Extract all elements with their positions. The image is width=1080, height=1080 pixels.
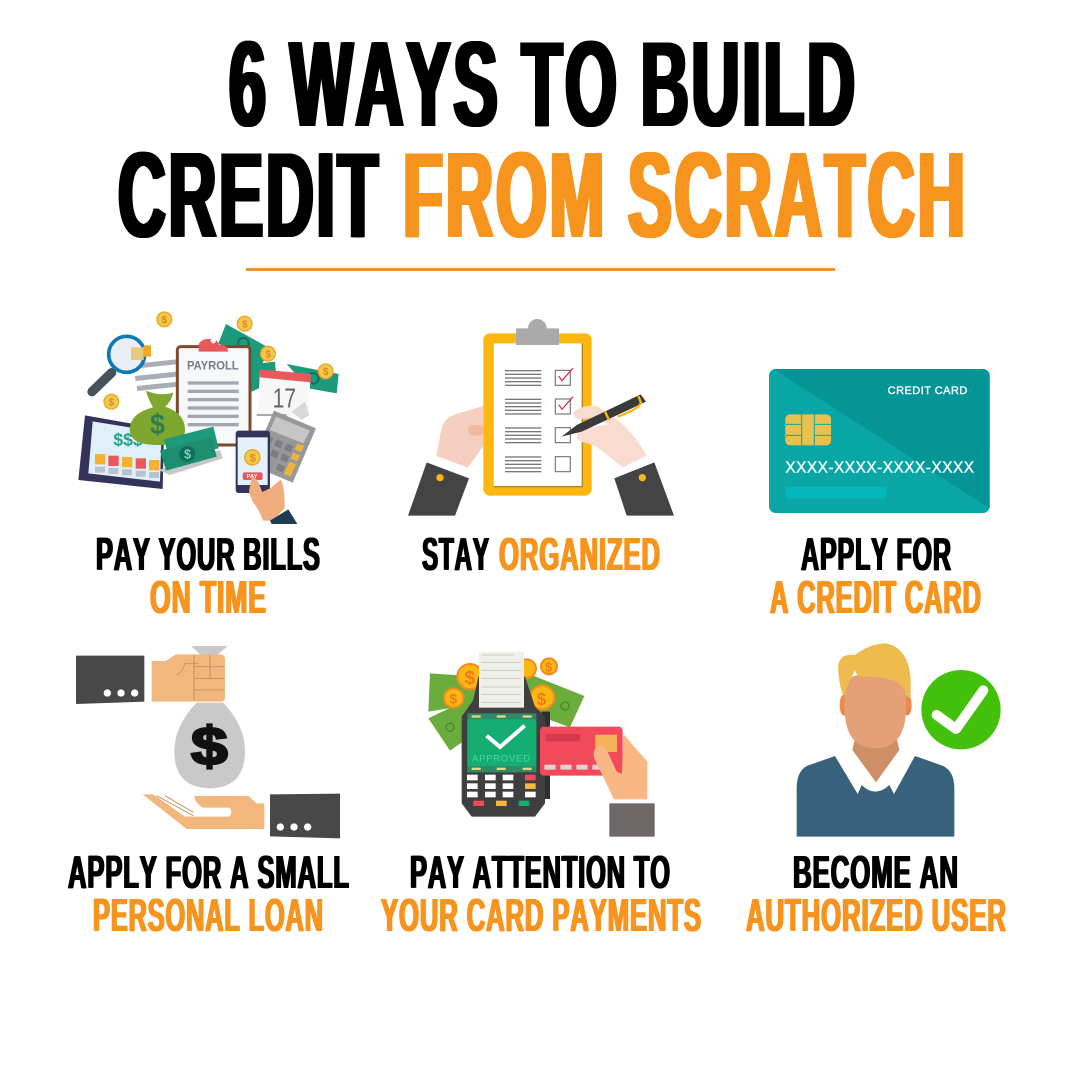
label: pay attention to your card payments: YOUR CARD PAYMENTS [381, 889, 702, 941]
green check badge [921, 670, 1001, 749]
shirt and collar [797, 747, 954, 837]
banknotes and coins: $ [464, 668, 475, 689]
label: apply for a credit card [770, 528, 982, 623]
banknotes [158, 427, 223, 475]
money bag: $ [150, 409, 165, 441]
label: pay attention to your card payments [380, 846, 702, 941]
coins: $ [242, 319, 248, 330]
money bag [130, 391, 185, 445]
bag: $ [191, 717, 228, 776]
face [845, 675, 906, 748]
icon: money bag handover [76, 646, 340, 838]
top hand [152, 654, 225, 702]
phone [236, 431, 270, 493]
calendar [257, 369, 311, 420]
clipboard: payroll [177, 338, 250, 445]
hair [838, 643, 911, 698]
label: become an authorized user: AUTHORIZED USER [746, 889, 1007, 941]
label: stay organized: ORGANIZED [499, 528, 661, 580]
bottom sleeve [270, 794, 340, 838]
tablet: $$$ [113, 430, 143, 450]
title underline [246, 268, 835, 271]
hand tapping phone [249, 478, 297, 524]
label: apply for a credit card: A CREDIT CARD [770, 571, 982, 623]
label: apply for a small personal loan: PERSONAL LOAN [93, 889, 324, 941]
label: apply for a small personal loan [68, 846, 350, 941]
terminal screen: APPROVED [472, 754, 530, 764]
label: stay organized [422, 528, 661, 580]
label: become an authorized user [746, 846, 1007, 941]
phone: PAY [247, 474, 258, 480]
title [118, 16, 968, 263]
clipboard [468, 319, 592, 496]
label: apply for a small personal loan: APPLY FOR A SMALL [68, 846, 350, 898]
checklist lines [505, 370, 541, 472]
title: 6 WAYS TO BUILD [229, 16, 858, 152]
label: become an authorized user: BECOME AN [793, 846, 959, 898]
keypad [467, 775, 536, 806]
coins [104, 312, 333, 409]
label: stay organized: STAY [422, 528, 490, 580]
label: pay your bills on time: ON TIME [150, 571, 267, 623]
left hand [408, 406, 483, 516]
label: apply for a credit card: APPLY FOR [801, 528, 952, 580]
bag [174, 646, 245, 788]
coins: $ [109, 397, 115, 408]
banknotes and coins: $ [545, 660, 552, 674]
checkboxes [555, 368, 573, 472]
receipt [479, 652, 524, 708]
banknotes and coins [428, 658, 584, 751]
title: CREDIT [118, 127, 381, 263]
chip [785, 414, 831, 445]
red card [540, 727, 623, 776]
icon: payment terminal [428, 652, 655, 837]
calendar: 17 [273, 382, 296, 413]
coins: $ [265, 349, 271, 360]
terminal [462, 677, 550, 817]
calculator [251, 411, 316, 483]
banknotes and coins: $ [449, 690, 457, 706]
phone: $ [250, 453, 257, 465]
label: pay your bills on time [96, 528, 321, 623]
right hand with pen [562, 394, 674, 516]
icon: credit card: XXXX-XXXX-XXXX-XXXX [785, 459, 974, 476]
terminal screen [467, 713, 536, 772]
icon: authorized user [797, 643, 1001, 837]
banknotes: $ [184, 448, 191, 462]
coins: $ [162, 315, 168, 326]
ears [840, 694, 912, 716]
bottom hand [143, 794, 264, 829]
magnifying glass [92, 336, 151, 392]
label: pay your bills on time: PAY YOUR BILLS [96, 528, 321, 580]
hand and sleeve [594, 734, 655, 837]
icon: clipboard checklist [408, 319, 674, 516]
clipboard: payroll: PAYROLL [187, 360, 239, 373]
coins: $ [323, 367, 329, 378]
label: pay attention to your card payments: PAY ATTENTION TO [410, 846, 671, 898]
icon: credit card [769, 369, 990, 513]
icon: payroll and bills [78, 312, 339, 524]
icon: credit card: CREDIT CARD [888, 385, 967, 397]
title: FROM SCRATCH [403, 127, 968, 263]
neck [852, 738, 899, 782]
tablet [78, 415, 164, 489]
top sleeve [76, 656, 144, 704]
banknotes and coins: $ [537, 689, 547, 709]
